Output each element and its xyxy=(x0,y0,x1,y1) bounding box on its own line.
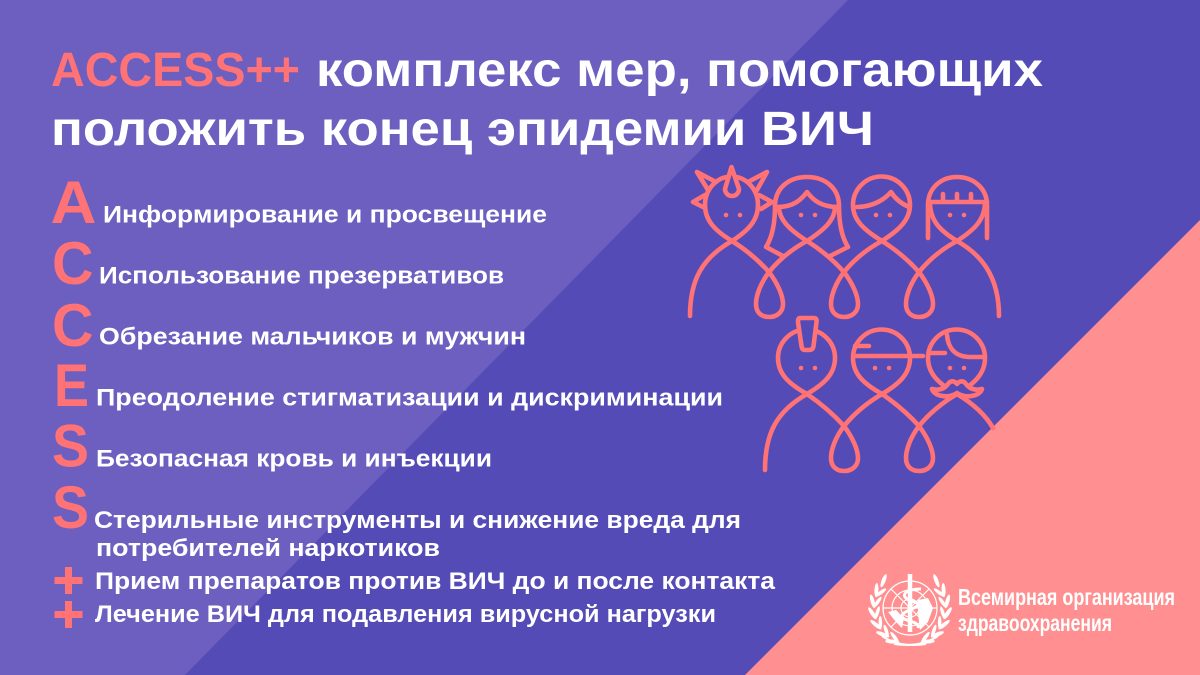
person: long hair xyxy=(766,177,882,317)
item C: condoms: Использование презервативов xyxy=(99,262,504,290)
item E: Преодоление стигматизации и дискриминации xyxy=(96,384,723,412)
title line one: комплекс мер, помогающих xyxy=(316,44,1043,97)
item S: sterile tools xyxy=(52,474,741,562)
WHO logo xyxy=(867,573,1175,645)
continents xyxy=(888,598,933,630)
person: spiked hair xyxy=(690,167,807,317)
list of measures xyxy=(50,169,775,628)
item plus: prophylaxis: Прием препаратов против ВИЧ до и после контакта xyxy=(95,568,775,595)
item A xyxy=(50,169,547,236)
item C: condoms: C xyxy=(52,230,94,297)
person: fringe bob xyxy=(928,177,999,316)
item C: circumcision xyxy=(52,292,526,359)
icon: WHO emblem xyxy=(867,573,953,645)
item E xyxy=(54,352,723,419)
illustration: people bottom row xyxy=(765,318,993,471)
person: mohawk xyxy=(765,318,882,471)
title accent: ACCESS++: ACCESS++ xyxy=(51,44,300,97)
wreath stems xyxy=(882,636,938,645)
WHO name xyxy=(958,584,1175,636)
item E: E xyxy=(54,352,89,419)
item S: sterile tools: потребителей наркотиков xyxy=(96,535,440,562)
item C: circumcision: C xyxy=(52,292,94,359)
staff and serpent xyxy=(902,574,921,632)
globe xyxy=(883,581,937,635)
background: light violet diagonal xyxy=(0,0,848,675)
item S: sterile tools: S xyxy=(52,474,89,541)
item plus: treatment: Лечение ВИЧ для подавления вирусной нагрузки xyxy=(95,601,716,628)
person: moustache xyxy=(928,330,993,428)
background: pink corner xyxy=(745,220,1200,675)
item S: blood: S xyxy=(52,412,89,480)
item A: A xyxy=(50,169,96,236)
illustration: people top row xyxy=(690,167,999,317)
item S: blood: Безопасная кровь и инъекции xyxy=(96,446,492,472)
item S: sterile tools: Стерильные инструменты и снижение вреда для xyxy=(94,507,741,534)
item C: condoms xyxy=(52,230,504,297)
laurel wreath xyxy=(867,573,953,644)
person: cap xyxy=(853,330,957,471)
person: short hair xyxy=(853,176,957,317)
item C: circumcision: Обрезание мальчиков и мужчин xyxy=(99,324,526,350)
item S: blood xyxy=(52,412,492,480)
WHO name: здравоохранения xyxy=(958,610,1112,636)
title line two: положить конец эпидемии ВИЧ xyxy=(51,103,874,156)
title xyxy=(51,44,1043,156)
item A: Информирование и просвещение xyxy=(103,202,547,228)
